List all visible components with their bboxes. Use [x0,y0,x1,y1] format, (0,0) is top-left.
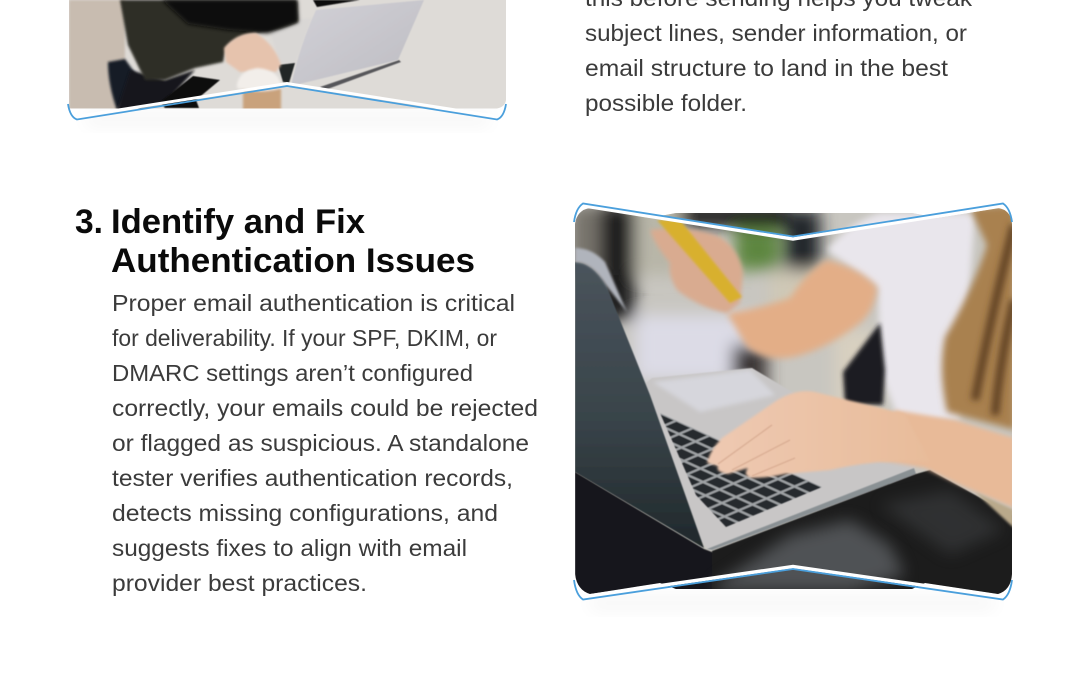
text block: tail of section 2: possible folder. [585,90,747,116]
dark base under the body [117,70,195,110]
hand [224,33,281,72]
laptop lid [575,262,704,548]
phone [160,76,220,108]
typing hand [706,390,897,480]
heading: section 3: Identify and Fix [111,203,365,241]
dark shirt gap [843,323,885,405]
text block: section 3 body: Proper email authentication is critical [112,290,515,316]
laptop base shadow line [320,60,401,90]
yellow phone [657,220,742,303]
keyboard [278,63,295,83]
laptop front edge [707,468,916,550]
table sheen [889,490,998,554]
heading: section 3: 3. [75,203,103,241]
chair [108,59,140,110]
dark shoulder [162,0,298,33]
hair [942,205,1015,430]
laptop screen edge [313,0,360,7]
shadow under bottom photo [590,596,995,610]
text block: tail of section 2 [585,0,973,116]
frame lines: top photo [68,84,506,120]
trackpad glow [653,370,775,412]
text block: section 3 body: suggests fixes to align with email [112,535,467,561]
blurred background [575,208,870,398]
text block: section 3 body: tester verifies authentication records, [112,465,513,491]
text block: section 3 body: detects missing configurations, and [112,500,498,526]
coffee cup [237,68,282,110]
heading: section 3: Authentication Issues [111,242,475,280]
sweater [120,0,298,80]
frame lines: bottom photo, top edge [574,204,1012,239]
keyboard [660,413,822,527]
text block: section 3 body: correctly, your emails could be rejected [112,395,538,421]
frame lines: bottom photo, bottom edge [574,566,1012,600]
text block: section 3 body: provider best practices. [112,570,367,596]
text block: tail of section 2: subject lines, sender information, or [585,20,967,46]
arm [727,260,877,358]
shadow under top photo [85,112,490,126]
text block: section 3 body [112,290,538,596]
heading: section 3 [75,203,475,280]
hand holding phone [650,229,743,313]
white table patch [267,18,312,64]
dark hair strands [975,225,1014,415]
text block: tail of section 2: email structure to land in the best [585,55,949,81]
photo: typing on laptop while holding yellow phone [570,205,1015,600]
forearm [880,410,1014,508]
text block: section 3 body: or flagged as suspicious. A standalone [112,430,529,456]
fingers [718,425,795,476]
beige corner [976,493,1012,528]
text block: section 3 body: for deliverability. If your SPF, DKIM, or [112,325,497,351]
table right [712,470,1015,600]
shirt [827,213,975,425]
table reflection [715,520,905,592]
text block: section 3 body: DMARC settings aren’t configured [112,360,473,386]
laptop base [648,367,783,416]
table left [575,472,720,600]
wall on the left [69,0,125,110]
photo: person working at laptop with coffee [69,0,506,110]
laptop lid [291,0,424,86]
lid top edge [575,248,627,312]
